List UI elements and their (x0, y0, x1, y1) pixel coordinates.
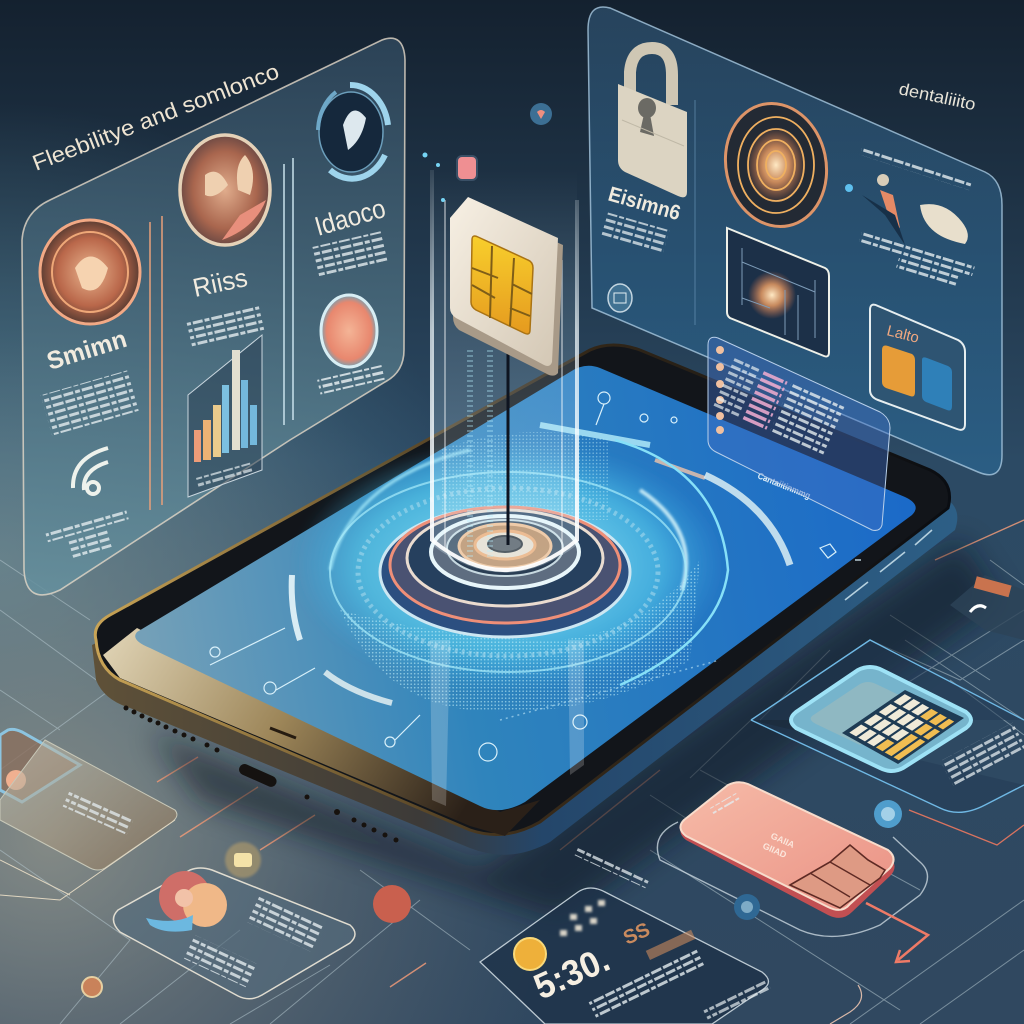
icon: charging port (237, 762, 278, 789)
label: Idaoco: Idaoco (311, 193, 389, 242)
icon: small peach badge (321, 295, 377, 367)
small HUD icons (210, 392, 861, 761)
icon: blue bubble (734, 894, 760, 920)
icon: fingerprint orb (714, 94, 838, 236)
heading: left panel: Fleebilitye and somlonco (29, 58, 282, 176)
icon: blue ring globe (318, 85, 388, 179)
speaker holes (124, 706, 398, 842)
icon: signal swirl (73, 448, 108, 494)
icon: gold badge (225, 842, 261, 878)
card: Lalto (870, 305, 965, 430)
phone shadow (150, 540, 1000, 920)
text block: card lines (247, 895, 323, 952)
glow dots (422, 152, 445, 202)
card: chip photo (727, 228, 829, 356)
text block: left column (41, 370, 139, 436)
text block: middle right (854, 232, 975, 291)
panel: calculator outline (751, 640, 1024, 812)
text block: upper right (860, 146, 972, 190)
card: pink SIM (680, 782, 895, 918)
text block: bottom caption (45, 510, 135, 563)
phone body side (92, 400, 957, 855)
icon: small gold dot (82, 977, 102, 997)
central rings (380, 507, 630, 637)
icon: heart bubble (530, 103, 552, 125)
icon: dots grid (560, 900, 605, 936)
price suffix: SS (620, 919, 653, 950)
text block: lower right (317, 365, 385, 394)
text block: calculator caption (940, 723, 1024, 786)
text block: middle column (186, 305, 265, 349)
icon: colored blob (146, 871, 227, 932)
phone screen (135, 366, 916, 810)
SIM chip (471, 236, 533, 334)
text block: under Eisimn6 (601, 213, 669, 253)
icon: red arrow (866, 903, 928, 962)
icon: panel connector ring (608, 284, 632, 312)
phone front (95, 345, 950, 834)
side buttons (845, 530, 932, 600)
price text: 5:30. (528, 938, 616, 1007)
card: Lalto: Lalto (885, 322, 921, 347)
phone (92, 345, 1000, 920)
card: lower-left info (113, 868, 355, 999)
sim beam (430, 170, 584, 806)
screen graphics: HUD rings (292, 425, 790, 720)
card: calculator sim (791, 667, 971, 771)
label: screen caption: Cantaiitinmmg (756, 471, 812, 501)
SIM card (450, 197, 563, 376)
label: pink card text: GAIIA (769, 831, 797, 850)
card: price panel (480, 888, 862, 1024)
label: right panel title: dentaliiito (897, 79, 977, 114)
text block: right column (312, 231, 387, 276)
icon: blue heart bubble (874, 800, 902, 828)
bar chart (188, 335, 262, 497)
panel: left lower glass (0, 740, 177, 900)
panel: left glass panel (22, 38, 405, 595)
keypad (849, 694, 954, 760)
card: far-right mini (950, 575, 1024, 640)
capsule outline around pink card (657, 822, 928, 936)
faint reflection (430, 640, 584, 806)
icon: red badge (373, 885, 411, 923)
text table: overlay list (708, 337, 890, 530)
icon: world map (845, 174, 968, 245)
label: Smimn: Smimn (44, 325, 130, 376)
icon: gold coin (514, 938, 546, 970)
label: pink card subtext: GIIAD (761, 841, 789, 860)
icon: speaker slot (270, 728, 296, 738)
icon: globe badge (180, 135, 270, 245)
label: Eisimn6: Eisimn6 (606, 183, 683, 225)
chin bezel (103, 628, 540, 836)
red connector (909, 810, 1024, 845)
text block: mid label (575, 848, 649, 888)
card: left mini sim (0, 729, 80, 802)
icon: orange ring badge (40, 220, 140, 324)
panel: right glass panel (588, 7, 1002, 530)
text block: card lines lower (184, 935, 257, 987)
icon: padlock (618, 48, 687, 197)
icon: tag above SIM (457, 156, 477, 180)
label: Riiss: Riiss (190, 262, 250, 303)
